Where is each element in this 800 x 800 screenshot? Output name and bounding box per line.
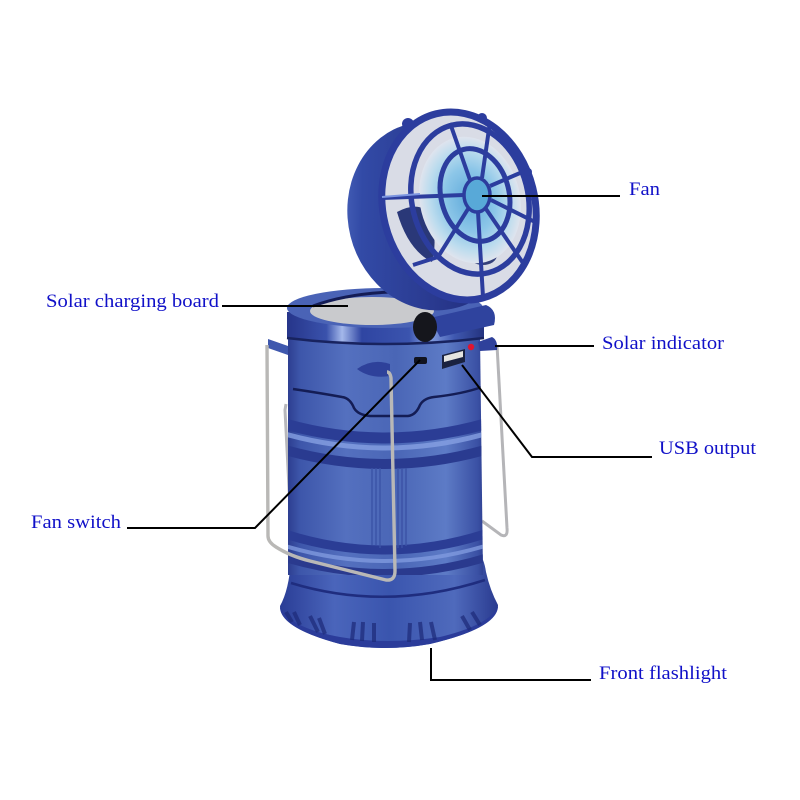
label: Solar indicator: Solar indicator xyxy=(602,333,725,354)
USB output port xyxy=(442,349,465,369)
label: Fan switch: Fan switch xyxy=(31,512,122,533)
label: Front flashlight: Front flashlight xyxy=(599,663,728,684)
base top edge xyxy=(291,580,485,597)
lantern xyxy=(268,288,498,648)
left handle mount xyxy=(268,339,288,355)
fan hub xyxy=(464,179,490,211)
fan lower shadow xyxy=(469,245,497,265)
rim nubs xyxy=(402,113,532,176)
right handle mount xyxy=(478,337,497,351)
rib bands xyxy=(285,424,485,573)
lantern base xyxy=(280,560,498,648)
solar board line xyxy=(222,305,348,307)
fan head xyxy=(328,95,556,328)
solar indicator line xyxy=(495,345,594,347)
fan line xyxy=(482,195,620,197)
fan inner white xyxy=(363,96,555,316)
upper groove line xyxy=(293,387,482,416)
USB line xyxy=(462,365,652,457)
lantern main body fill xyxy=(286,335,486,580)
back left handle wire xyxy=(285,404,292,546)
back right handle wire xyxy=(482,345,507,536)
solar charging board panel xyxy=(310,297,434,325)
label: USB output: USB output xyxy=(659,438,757,459)
fan blades xyxy=(406,126,534,274)
hinge knob xyxy=(413,312,437,342)
label: Fan: Fan xyxy=(629,179,661,200)
switch housing bump xyxy=(357,362,390,377)
vertical pillars xyxy=(372,468,406,548)
base flutes xyxy=(286,612,480,642)
fan switch line xyxy=(127,360,420,528)
callout lines xyxy=(127,196,652,680)
lantern top disc xyxy=(287,288,483,328)
fan guard xyxy=(362,95,556,317)
hinge arm xyxy=(430,305,495,337)
flashlight line xyxy=(431,648,591,680)
front handle wire xyxy=(267,345,395,580)
guard highlight xyxy=(382,194,420,197)
solar indicator LED xyxy=(468,344,474,350)
base lower dark rim xyxy=(280,606,498,648)
label: Solar charging board: Solar charging board xyxy=(46,291,220,312)
lantern collar xyxy=(287,312,484,344)
fan housing xyxy=(328,104,536,328)
infographic: solar lantern with fan xyxy=(32,108,756,683)
lantern body with ribs xyxy=(285,335,486,580)
fan switch xyxy=(414,357,427,364)
fan motor shadow xyxy=(397,207,435,262)
